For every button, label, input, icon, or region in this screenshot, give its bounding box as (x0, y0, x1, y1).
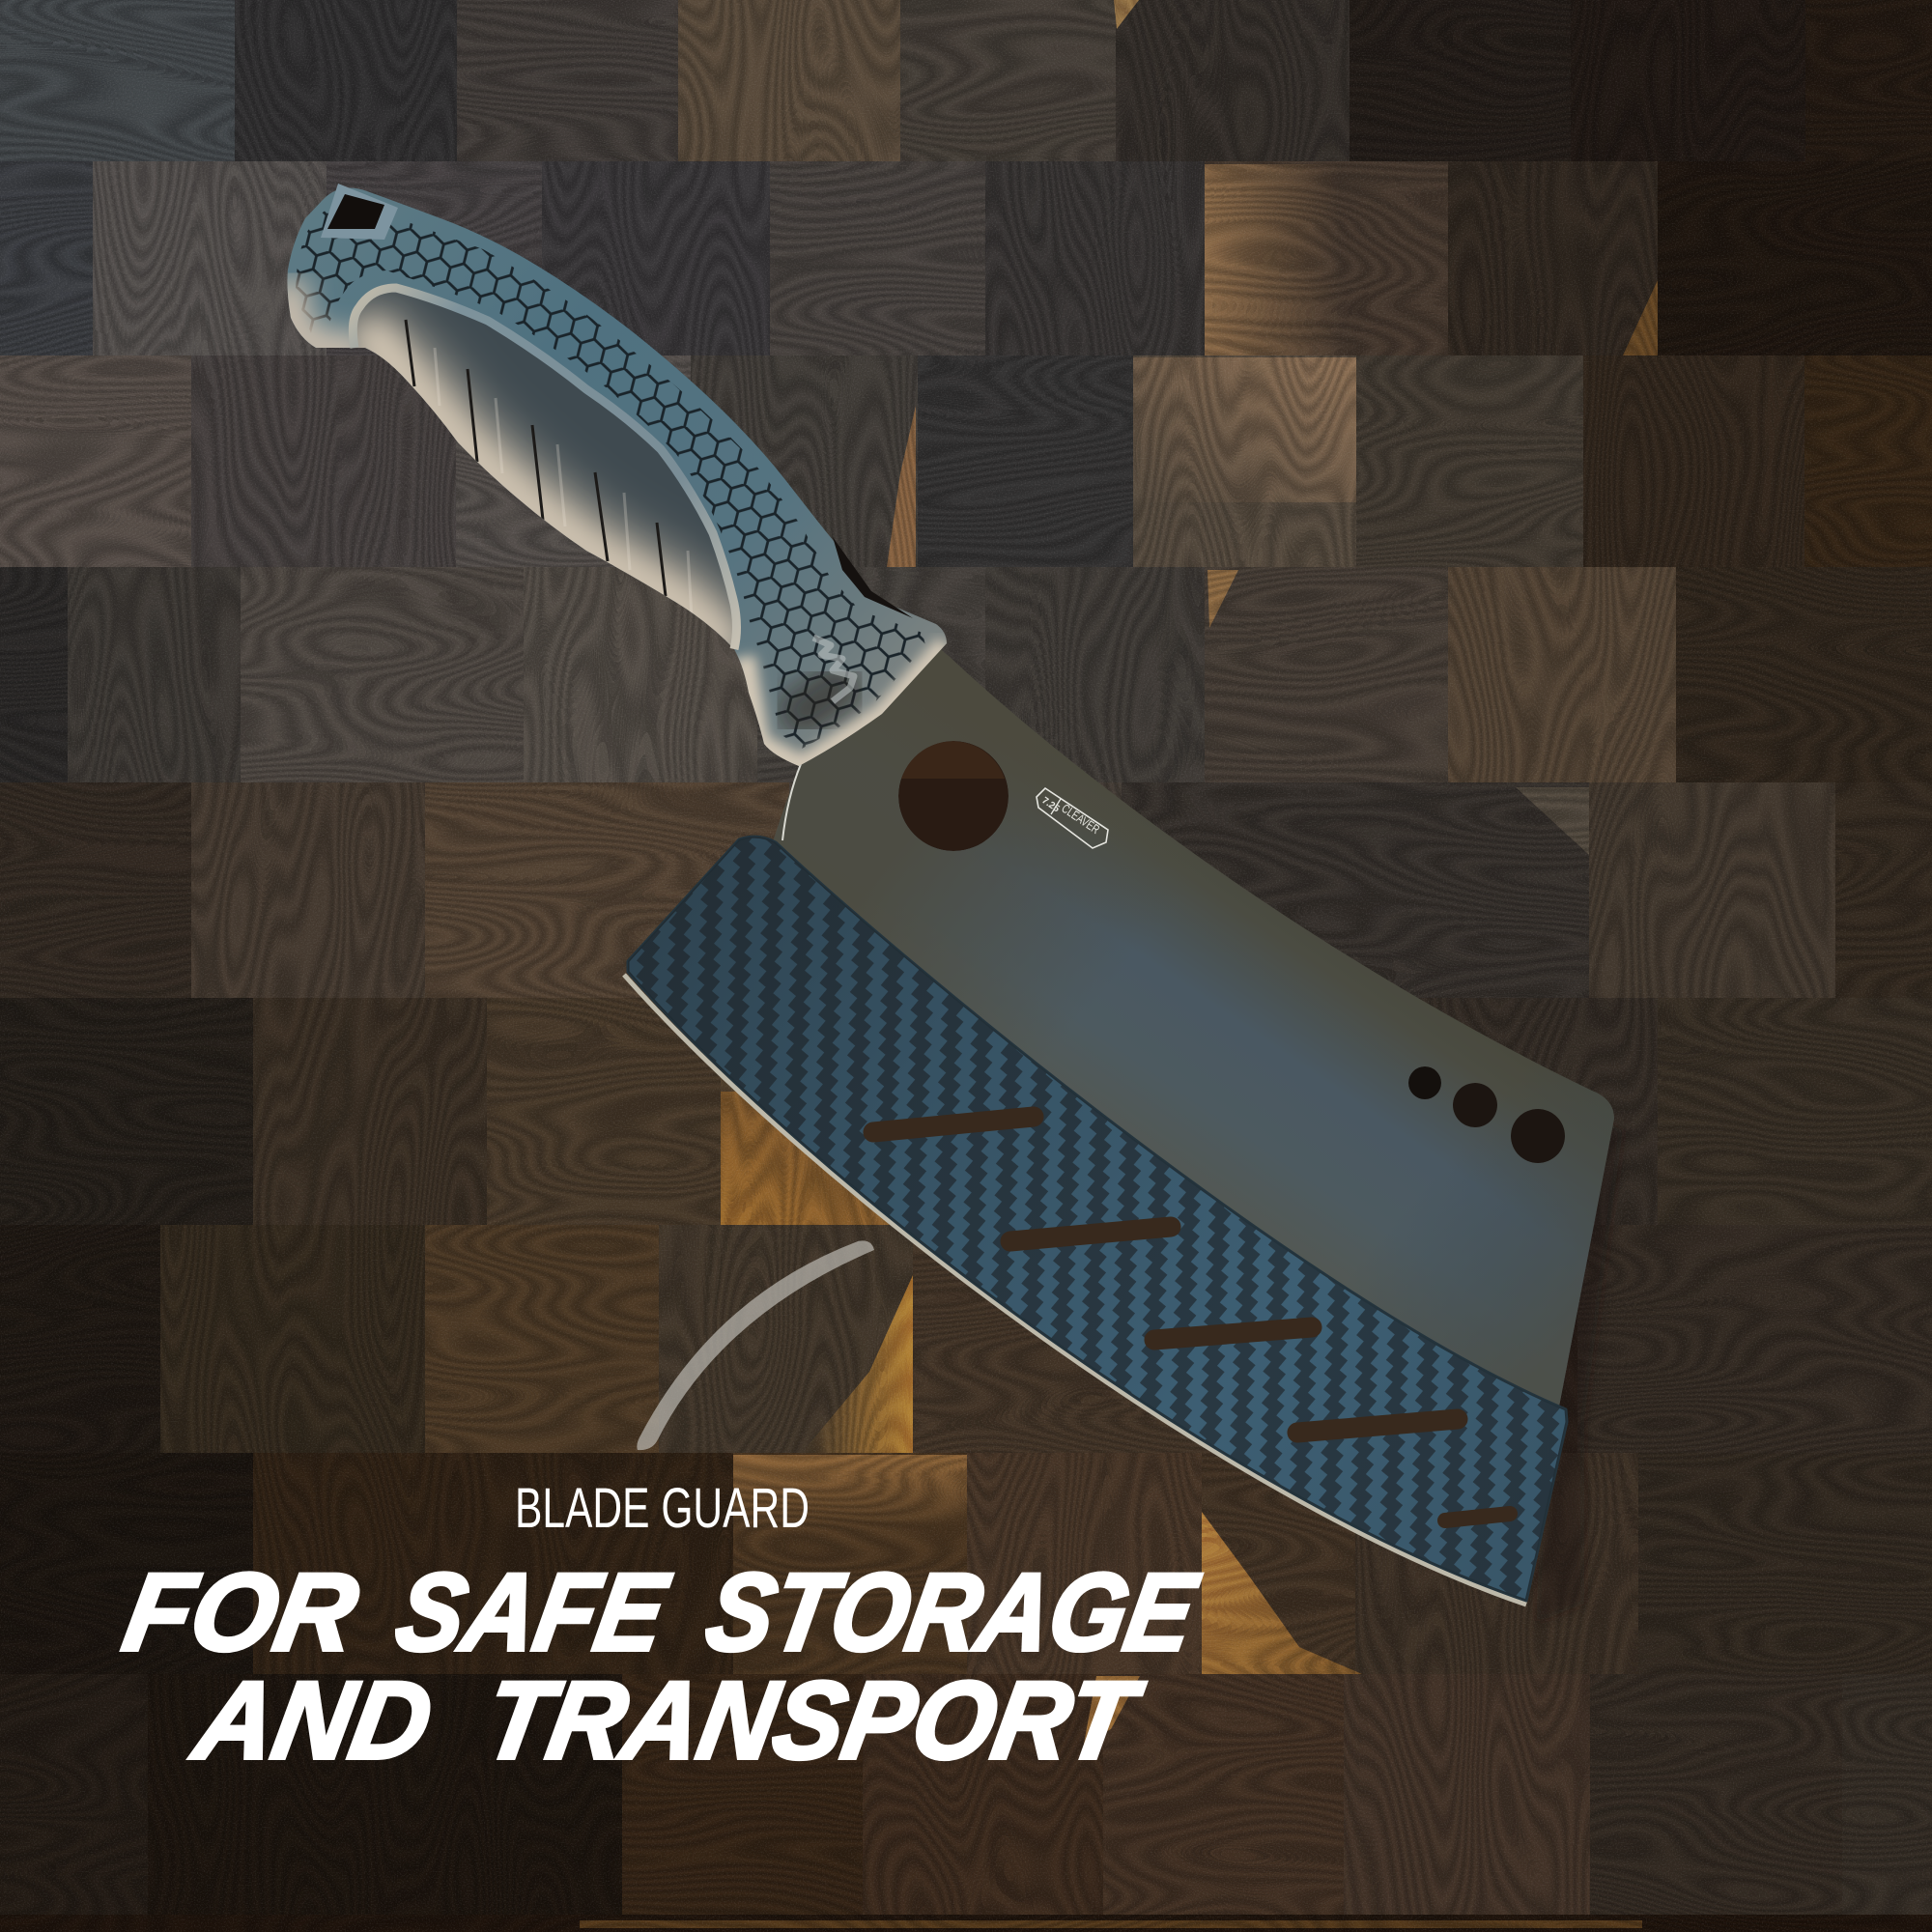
row 9 wood blocks (0, 1674, 1932, 1915)
headline line 1: FOR (116, 1551, 366, 1674)
grip upper rim (353, 288, 736, 649)
handle logo (813, 638, 854, 701)
handle hex texture (296, 211, 925, 749)
handle shading (290, 280, 947, 768)
caption: blade guard: BLADE GUARD (515, 1477, 810, 1540)
handle (270, 174, 966, 773)
row 4 wood blocks (0, 567, 1932, 782)
lanyard hole (321, 184, 398, 240)
row 5 wood blocks (0, 782, 1932, 998)
headline line 1: SAFE (388, 1551, 677, 1674)
row 2 wood blocks (0, 161, 1932, 355)
blade shadow (1536, 1101, 1623, 1623)
row 3 wood blocks (0, 355, 1932, 567)
handle notch shadow (833, 537, 913, 618)
headline line 2: AND (185, 1660, 440, 1782)
blade label: 7.25 inch cleaver (1037, 788, 1108, 848)
row 8 wood blocks (0, 1453, 1932, 1674)
row 1 wood blocks (0, 0, 1932, 161)
guard pale rim (624, 975, 1526, 1605)
guard slots (873, 1117, 1510, 1520)
board bottom edge (0, 1915, 1932, 1932)
headline (116, 1551, 1207, 1782)
row 7 wood blocks (0, 1225, 1932, 1453)
knife (270, 174, 1623, 1623)
blade holes backing (898, 741, 1565, 1163)
guard body (628, 837, 1567, 1601)
blade (773, 645, 1614, 1406)
row 6 wood blocks (0, 998, 1932, 1225)
blade guard (624, 837, 1567, 1605)
headline line 1: STORAGE (698, 1551, 1207, 1674)
headline line 2: TRANSPORT (476, 1660, 1151, 1782)
arrow pointing to blade guard (637, 1240, 874, 1450)
guard shading (628, 837, 1567, 1601)
blade label: 7.25 inch cleaver: 7.25 (1039, 795, 1062, 815)
finger grip (353, 288, 736, 649)
blade label: 7.25 inch cleaver: CLEAVER (1059, 801, 1102, 837)
